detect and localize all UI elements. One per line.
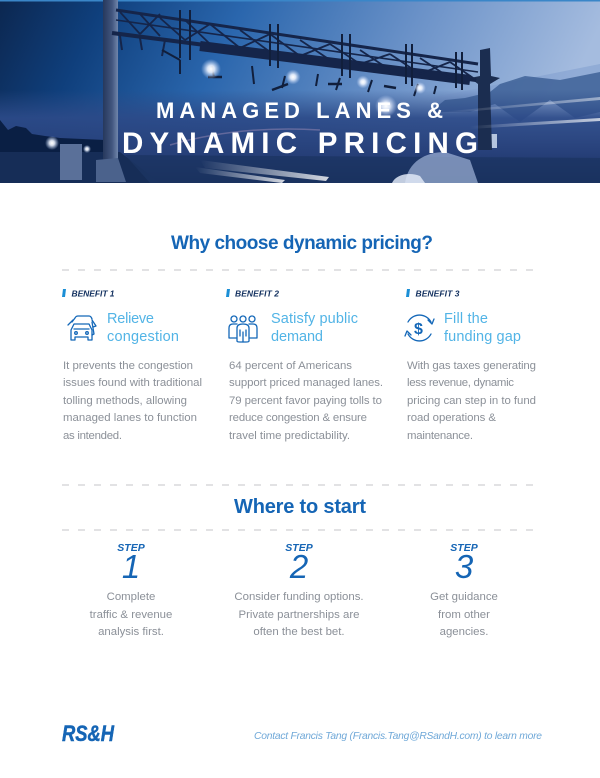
text: benefit 3 description: less revenue, dynamic [407,377,514,389]
step 1 label: STEP [117,542,146,554]
heading: fill the funding gap: funding gap [444,329,521,345]
text: benefit 1 description: managed lanes to function [63,412,197,424]
light streaks [170,97,600,183]
text: benefit 3 description [407,360,536,442]
gantry truss [112,10,478,80]
panel: step 2 [234,542,364,638]
step 2 label: STEP [285,542,314,554]
gantry right pole [470,48,500,150]
text: step 3 description: agencies. [440,626,488,638]
text: step 1 description [90,591,172,638]
text: benefit 1 description: as intended. [63,430,122,442]
text: step 2 description: Consider funding options. [234,591,364,603]
icon: dollar with cycle arrows: $ [414,321,423,338]
benefit 2 label: BENEFIT 2 [235,288,279,298]
text: step 1 description: Complete [107,591,155,603]
heading: satisfy public demand: demand [271,329,323,345]
heading: relieve congestion: congestion [107,329,179,345]
heading: relieve congestion: Relieve [107,311,154,327]
step 3 label: 3 [455,548,474,585]
panel: step 1 [90,542,172,638]
step 1 label: 1 [122,548,140,585]
text: benefit 3 description: pricing can step in to fund [407,395,536,407]
gantry left pole [103,0,118,172]
hero photo: toll gantry at dusk [0,0,600,183]
text: step 2 description: often the best bet. [253,626,345,638]
panel: benefit 3 [405,288,536,442]
text: benefit 2 description: travel time predictability. [229,430,350,442]
step 2 label: 2 [289,548,308,585]
truck cab [405,152,478,183]
heading: where to start: Where to start [234,496,366,518]
text: benefit 3 description: road operations & [407,412,496,424]
hero title: MANAGED LANES & [156,98,443,123]
text: benefit 1 description: issues found with traditional [63,377,202,389]
icon: dollar with cycle arrows [405,315,434,341]
roadside kiosk [60,144,82,180]
icon: group of people [229,316,257,342]
gantry lights [45,59,426,153]
text: benefit 3 description: maintenance. [407,430,473,442]
text: benefit 2 description: support priced managed lanes. [229,377,383,389]
text: benefit 1 description [63,360,202,442]
heading: fill the funding gap: Fill the [444,311,488,327]
heading: fill the funding gap [444,311,521,345]
road and lower band [0,90,600,183]
benefit 3 label: BENEFIT 3 [416,288,460,298]
text: benefit 1 description: It prevents the congestion [63,360,193,372]
text: step 2 description [234,591,364,638]
step 3 label [450,542,479,585]
hero title: DYNAMIC PRICING [122,127,478,160]
tree line left [0,120,105,152]
translucent truck trailer right [430,64,600,183]
text: benefit 3 description: With gas taxes generating [407,360,536,372]
step 1 label [117,542,146,585]
text: step 1 description: analysis first. [98,626,164,638]
contact line: Contact Francis Tang (Francis.Tang@RSandH.com) to learn more [254,731,542,742]
panel: step 3 [430,542,498,638]
text: benefit 2 description [229,360,383,442]
benefit 1 label: BENEFIT 1 [72,288,115,298]
text: benefit 2 description: 64 percent of Americans [229,360,352,372]
heading: satisfy public demand [271,311,358,345]
text: step 2 description: Private partnerships are [239,609,359,621]
gantry service ladders and hanging sensors [162,10,462,96]
heading: relieve congestion [107,311,179,345]
text: step 3 description: Get guidance [430,591,498,603]
text: benefit 2 description: 79 percent favor paying tolls to [229,395,382,407]
text: step 3 description [430,591,498,638]
panel: benefit 1 [62,288,202,442]
heading: why choose dynamic pricing: Why choose dynamic pricing? [171,233,433,254]
icon: cars in traffic [68,316,96,340]
step 2 label [285,542,314,585]
hero title [122,98,478,160]
text: step 1 description: traffic & revenue [90,609,172,621]
logo: RS&H: RS&H [62,721,115,746]
step 3 label: STEP [450,542,479,554]
heading: satisfy public demand: Satisfy public [271,311,358,327]
panel: benefit 2 [226,288,383,442]
text: benefit 1 description: tolling methods, allowing [63,395,187,407]
text: benefit 2 description: reduce congestion & ensure [229,412,367,424]
road sign [481,134,497,148]
text: step 3 description: from other [438,609,490,621]
